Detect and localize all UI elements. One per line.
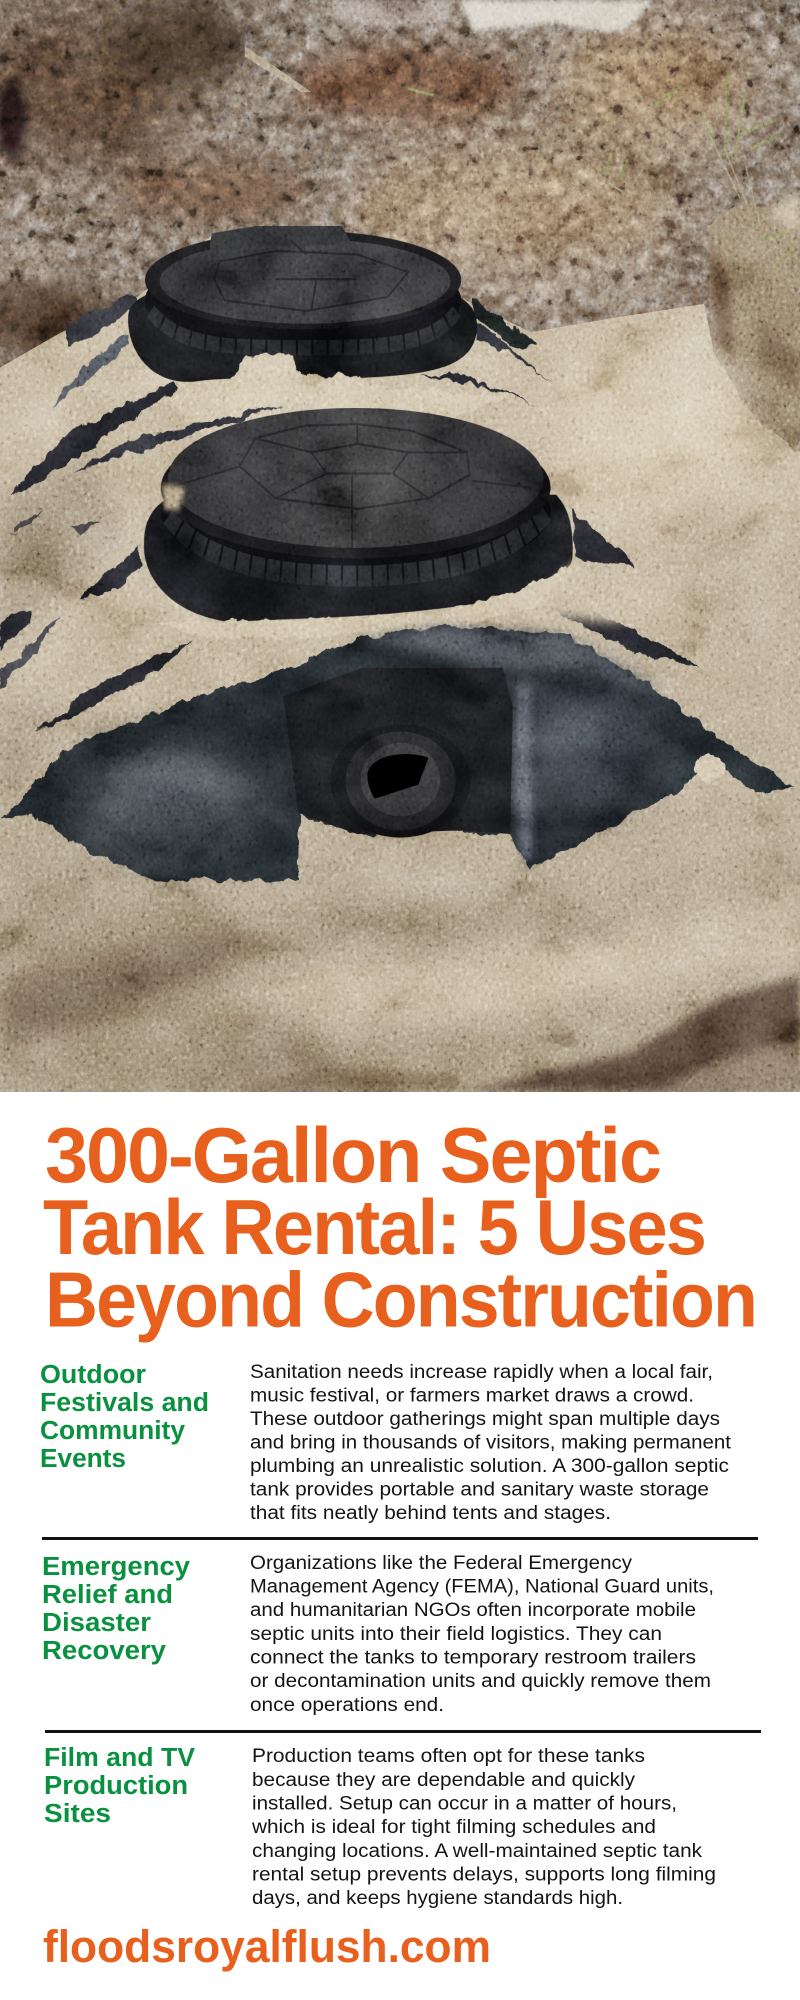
heading: Sites [44,1800,111,1828]
body text: once operations end. [250,1694,444,1716]
heading [42,1553,191,1665]
heading: Film and TV [44,1744,195,1772]
rear tank riser and lid [51,226,551,438]
heading: Community [40,1417,186,1445]
sand over front ring [153,562,602,640]
body text: These outdoor gatherings might span multiple days [250,1408,720,1430]
body text: changing locations. A well-maintained septic tank [252,1840,702,1862]
body text: plumbing an unrealistic solution. A 300-gallon septic [250,1455,729,1477]
title: Beyond Construction [45,1256,756,1344]
body text [251,1745,716,1909]
mottled light overlay [0,0,800,1092]
grass tufts [408,71,796,269]
title [43,1111,756,1344]
clods speckle [0,0,800,452]
footer website: floodsroyalflush.com [43,1921,491,1972]
body text: days, and keeps hygiene standards high. [252,1887,623,1909]
photo: septic tank partly buried in sand [0,0,800,1092]
heading [40,1361,209,1473]
body text: that fits neatly behind tents and stages. [250,1502,611,1524]
section: outdoor festivals [40,1361,732,1524]
heading [44,1744,195,1828]
body text: which is ideal for tight filming schedules and [251,1816,656,1838]
title: Tank Rental: 5 Uses [43,1183,705,1271]
soil bank behind the tank [0,0,800,452]
exposed tank body with inlet pipe [3,626,793,880]
sand mound shading [0,353,800,1092]
heading: Emergency [42,1553,191,1581]
body text [250,1552,714,1716]
body text: Organizations like the Federal Emergency [250,1552,632,1574]
heading: Disaster [42,1609,151,1637]
heading: Production [44,1772,188,1800]
soil wall on right [707,205,800,452]
title: 300-Gallon Septic [45,1111,661,1199]
body text: because they are dependable and quickly [252,1769,635,1791]
heading: Relief and [42,1581,173,1609]
sand clump [694,755,727,783]
ribs beside rear tank [51,293,551,406]
center panel [283,668,513,834]
body text: music festival, or farmers market draws a crowd. [250,1384,694,1406]
body text: septic units into their field logistics. They can [250,1623,662,1645]
section: emergency relief [42,1552,714,1716]
front tank riser and lid [144,408,699,640]
sand-covered black ribs [0,382,699,732]
body text: tank provides portable and sanitary waste storage [250,1478,709,1500]
body text: rental setup prevents delays, supports long filming [252,1864,716,1886]
heading: Outdoor [40,1361,146,1389]
body text: Management Agency (FEMA), National Guard units, [250,1576,714,1598]
body text: Production teams often opt for these tanks [252,1745,645,1767]
heading: Festivals and [40,1389,209,1417]
heading: Recovery [42,1637,167,1665]
body text: and humanitarian NGOs often incorporate mobile [250,1599,696,1621]
section: film and tv [44,1744,716,1909]
body text: or decontamination units and quickly remove them [250,1670,711,1692]
pipe fitting [331,724,470,838]
body text: Sanitation needs increase rapidly when a local fair, [250,1361,713,1383]
sand over rear ring [163,357,510,438]
sand texture overlay [0,0,800,1092]
rear lid band [145,247,461,354]
body text: installed. Setup can occur in a matter of hours, [252,1792,677,1814]
body text: connect the tanks to temporary restroom trailers [250,1646,696,1668]
body text [250,1361,732,1524]
stones at top edge [332,0,454,28]
heading: Events [40,1445,126,1473]
sand ground [0,0,800,1092]
body text: and bring in thousands of visitors, making permanent [250,1432,732,1454]
